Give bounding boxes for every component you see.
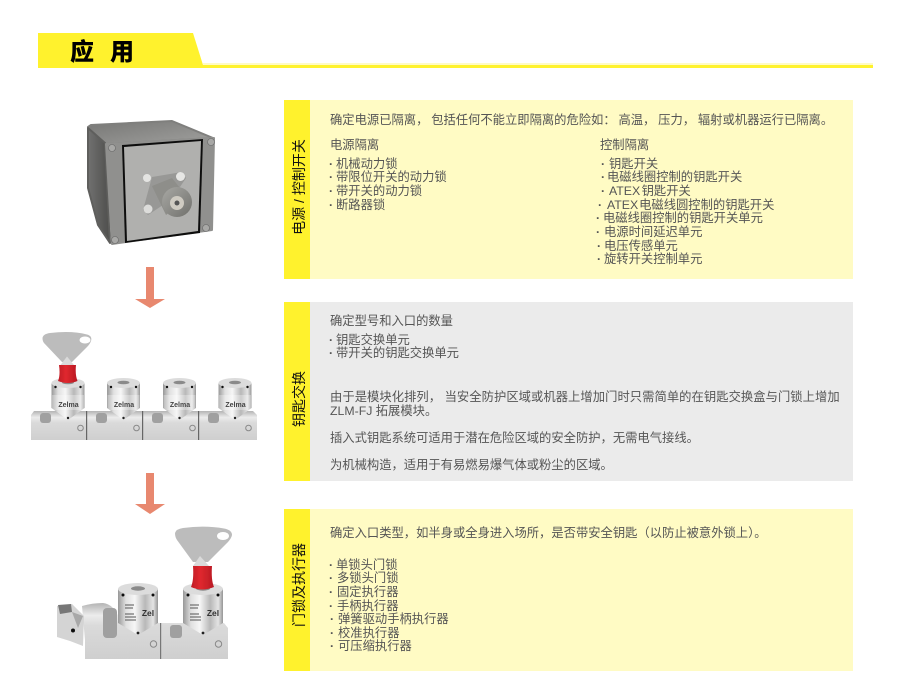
title banner (38, 33, 873, 68)
list: door lock types: 多锁头门锁 (337, 571, 398, 585)
list: power isolation: · (329, 198, 333, 212)
panel background (310, 509, 853, 671)
list: control isolation: 电磁线圈控制的钥匙开关单元 (603, 211, 763, 225)
list: control isolation: 电磁线圈控制的钥匙开关 (607, 170, 742, 184)
list: control isolation: · (596, 211, 600, 225)
list: door lock types: 手柄执行器 (337, 599, 398, 613)
list: door lock types: 单锁头门锁 (336, 558, 398, 572)
list: key exchange types: · (329, 346, 333, 360)
text: door intro: 确定入口类型，如半身或全身进入场所，是否带安全钥匙（以防止被意外锁上）。 (330, 526, 767, 540)
list: control isolation: · (597, 252, 601, 266)
list: power isolation (329, 138, 447, 212)
list: power isolation: · (329, 157, 333, 171)
list: door lock types: · (330, 626, 334, 640)
list: door lock types: · (329, 599, 333, 613)
list: key exchange types (329, 314, 459, 360)
list: control isolation: · (601, 184, 605, 198)
list: control isolation: · (601, 157, 605, 171)
list: power isolation: 带限位开关的动力锁 (336, 170, 447, 184)
list: control isolation: · (597, 239, 601, 253)
icon: key exchange unit (31, 332, 257, 440)
list: door lock types: 校准执行器 (338, 626, 400, 640)
list: control isolation (596, 138, 774, 266)
list: control isolation: 电源时间延迟单元 (604, 225, 702, 239)
text: modular arrangement: 由于是模块化排列， 当安全防护区域或机器上增加门时只需简单的在钥匙交换盒与门锁上增加 (330, 390, 840, 404)
list: key exchange types: · (329, 333, 333, 347)
panel background (310, 100, 853, 279)
panel: door locks and actuators (284, 509, 853, 671)
icon: door lock and actuator (57, 527, 232, 659)
list: door lock types: 弹簧驱动手柄执行器 (338, 612, 449, 626)
text: modular arrangement (330, 390, 840, 418)
list: control isolation: ATEX 钥匙开关 (609, 184, 691, 198)
panel: key exchange (284, 302, 853, 481)
list: power isolation: 电源隔离 (330, 138, 379, 152)
side label: power / control switch: 电源 / 控制开关 (291, 139, 307, 235)
text: power intro: 确定电源已隔离， 包括任何不能立即隔离的危险如： 高温， 压力， 辐射或机器运行已隔离。 (330, 113, 833, 127)
list: key exchange types: 钥匙交换单元 (336, 333, 410, 347)
list: door lock types: · (329, 558, 333, 572)
list: control isolation: · (601, 170, 605, 184)
text: mechanical construction: 为机械构造，适用于有易燃易爆气体或粉尘的区域。 (330, 458, 613, 472)
list: control isolation: 旋转开关控制单元 (604, 252, 702, 266)
list: door lock types: 固定执行器 (337, 585, 398, 599)
list: control isolation: 控制隔离 (600, 138, 649, 152)
arrow: key exchange to door lock (135, 473, 165, 514)
list: key exchange types: 带开关的钥匙交换单元 (336, 346, 459, 360)
list: control isolation: · (598, 198, 602, 212)
side tab (284, 100, 310, 279)
list: key exchange types: 确定型号和入口的数量 (330, 314, 453, 328)
side tab (284, 509, 310, 671)
side tab (284, 302, 310, 481)
side label: key exchange: 钥匙交换 (291, 371, 307, 427)
list: power isolation: 断路器锁 (336, 198, 385, 212)
list: door lock types: · (330, 612, 334, 626)
list: control isolation: · (596, 225, 600, 239)
panel: power / control switch (284, 100, 853, 279)
list: door lock types: · (330, 639, 334, 653)
text: modular arrangement: ZLM-FJ 拓展模块。 (330, 404, 437, 418)
list: power isolation: · (329, 170, 333, 184)
icon: metal switch box (88, 121, 214, 244)
list: power isolation: 机械动力锁 (336, 157, 398, 171)
arrow: box to key exchange (135, 267, 165, 308)
list: power isolation: 带开关的动力锁 (336, 184, 422, 198)
side label: door locks and actuators: 门锁及执行器 (291, 543, 307, 627)
panel background (310, 302, 853, 481)
list: control isolation: 钥匙开关 (609, 157, 658, 171)
list: control isolation: ATEX 电磁线圆控制的钥匙开关 (607, 198, 774, 212)
list: door lock types: 可压缩执行器 (338, 639, 412, 653)
list: control isolation: 电压传感单元 (604, 239, 678, 253)
list: door lock types: · (329, 585, 333, 599)
title: 应用 (70, 39, 150, 66)
list: power isolation: · (329, 184, 333, 198)
list: door lock types: · (329, 571, 333, 585)
list: door lock types (329, 558, 449, 653)
text: plug-in key system: 插入式钥匙系统可适用于潜在危险区域的安全防护，无需电气接线。 (330, 431, 699, 445)
illustrations column (31, 120, 257, 659)
